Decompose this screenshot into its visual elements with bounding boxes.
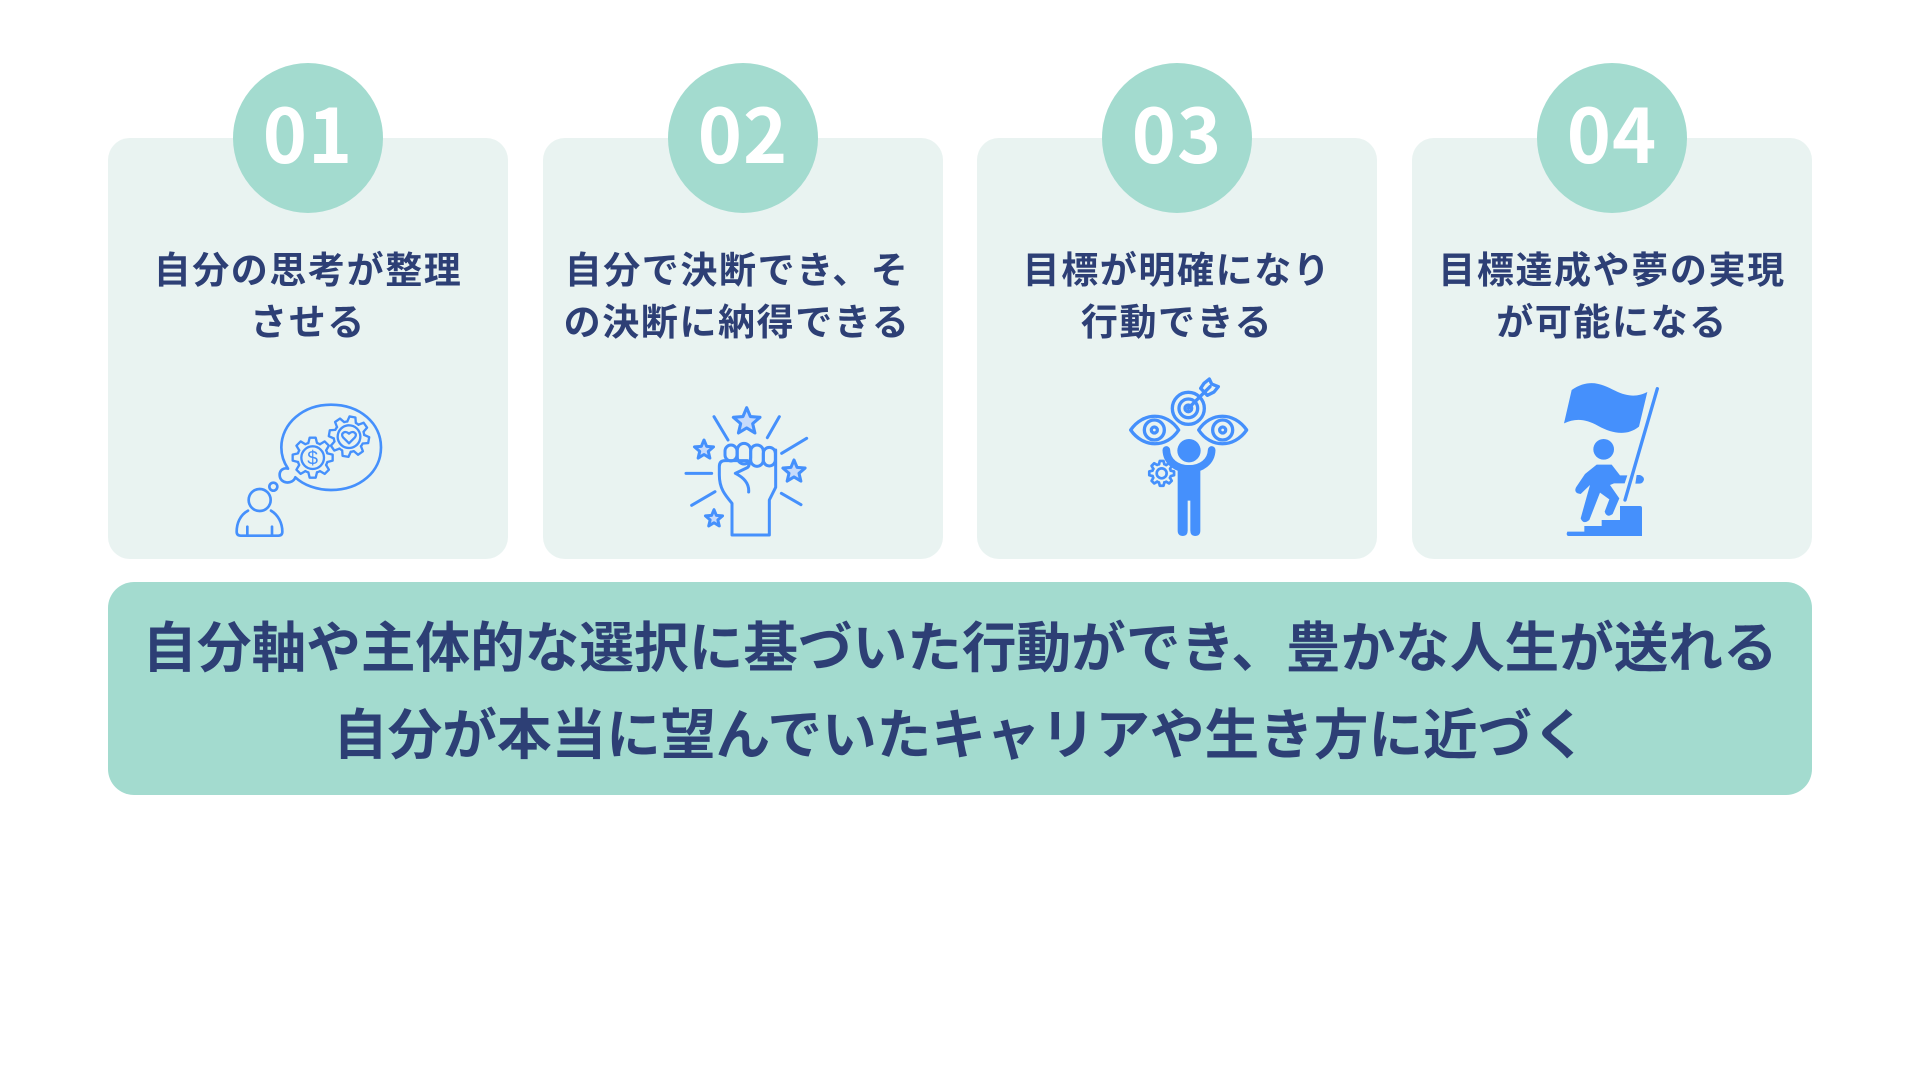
number badge 04: 04 bbox=[1567, 76, 1657, 185]
heading: step 1 bbox=[154, 240, 462, 346]
icon: person climbing stairs with flag bbox=[1564, 383, 1659, 536]
heading: step 3 bbox=[1023, 240, 1331, 346]
heading: step 3: 目標が明確になり bbox=[1023, 240, 1331, 294]
icon: person thinking with gears: $ bbox=[307, 449, 318, 470]
panel: step 4 bbox=[1412, 63, 1812, 559]
heading: step 3: 行動できる bbox=[1081, 292, 1273, 346]
number badge 03 bbox=[1102, 63, 1252, 213]
conclusion line 2: 自分が本当に望んでいたキャリアや生き方に近づく bbox=[333, 691, 1587, 770]
heading: step 4: 目標達成や夢の実現 bbox=[1438, 240, 1786, 294]
icon: person with eyes and target bbox=[1129, 377, 1248, 536]
heading: step 2: の決断に納得できる bbox=[564, 292, 910, 346]
number badge 03: 03 bbox=[1132, 76, 1222, 185]
heading: step 2 bbox=[564, 240, 910, 346]
conclusion line 1: 自分軸や主体的な選択に基づいた行動ができ、豊かな人生が送れる bbox=[142, 604, 1778, 683]
panel: step 2 bbox=[543, 63, 943, 559]
icon: raised fist with stars bbox=[684, 406, 808, 536]
heading: step 4 bbox=[1438, 240, 1786, 346]
panel: step 1 bbox=[108, 63, 508, 559]
panel: step 3 bbox=[977, 63, 1377, 559]
heading: step 1: 自分の思考が整理 bbox=[154, 240, 462, 294]
conclusion banner bbox=[108, 582, 1812, 795]
number badge 01: 01 bbox=[263, 76, 353, 185]
heading: step 2: 自分で決断でき、そ bbox=[565, 240, 909, 294]
icon: person thinking with gears bbox=[235, 403, 382, 537]
number badge 02 bbox=[668, 63, 818, 213]
number badge 01 bbox=[233, 63, 383, 213]
heading: step 1: させる bbox=[250, 292, 366, 346]
number badge 04 bbox=[1537, 63, 1687, 213]
heading: step 4: が可能になる bbox=[1496, 292, 1728, 346]
number badge 02: 02 bbox=[698, 76, 788, 185]
